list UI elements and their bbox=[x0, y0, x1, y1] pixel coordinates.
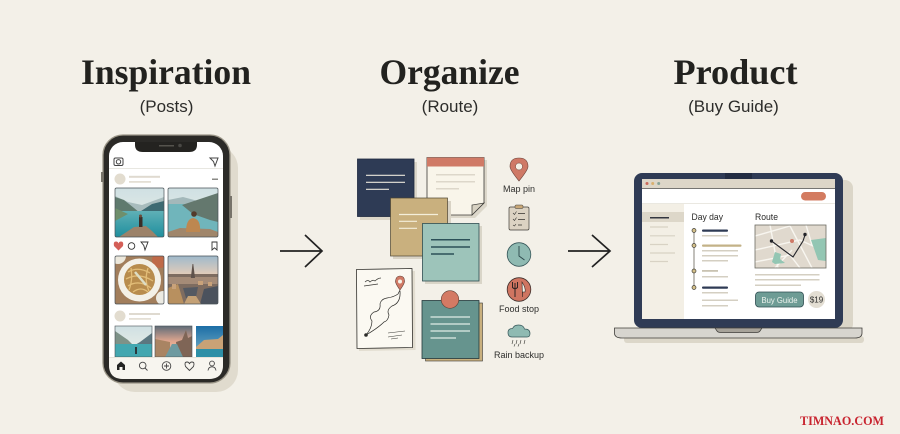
price badge: $19 bbox=[810, 296, 824, 304]
icon: clock bbox=[507, 243, 531, 266]
icon: search bbox=[139, 362, 148, 370]
route sketch map bbox=[356, 268, 416, 351]
icon: camera bbox=[114, 158, 123, 166]
icon: route pin bbox=[395, 276, 405, 290]
photo: lake hiker bbox=[115, 188, 164, 237]
note: cream with header bbox=[427, 158, 487, 218]
icon: add bbox=[162, 362, 171, 370]
note: teal bbox=[422, 224, 482, 284]
laptop mockup bbox=[614, 173, 864, 343]
photo: lake sitter bbox=[168, 188, 218, 237]
watermark: TIMNAO.COM bbox=[800, 414, 884, 428]
infographic canvas bbox=[82, 59, 884, 425]
photo: pasta plate bbox=[115, 256, 164, 304]
heading: Organize: (Route) bbox=[422, 97, 478, 116]
post header bbox=[114, 174, 218, 184]
route map bbox=[755, 225, 826, 268]
icon: map pin bbox=[503, 158, 535, 194]
note: tan bbox=[390, 198, 451, 259]
sidebar bbox=[642, 204, 684, 319]
icon: checklist clipboard bbox=[509, 205, 529, 230]
heading: Organize: Organize bbox=[380, 52, 520, 92]
icon: map pin: Map pin bbox=[503, 184, 535, 194]
day itinerary bbox=[692, 212, 742, 306]
route panel: Route bbox=[755, 212, 778, 223]
button: Buy Guide: Buy Guide bbox=[762, 295, 798, 305]
icon: home bbox=[117, 362, 125, 370]
heading: Organize bbox=[380, 52, 520, 116]
post header bbox=[114, 310, 160, 322]
phone mockup bbox=[101, 135, 238, 392]
arrow: inspiration to organize bbox=[280, 235, 322, 267]
heading: Inspiration: (Posts) bbox=[140, 97, 193, 116]
photo: city skyline bbox=[168, 256, 218, 304]
bottom navigation bbox=[109, 357, 223, 379]
laptop base bbox=[614, 328, 862, 338]
note: dark teal with pin bbox=[422, 291, 482, 361]
note: navy bbox=[358, 159, 417, 220]
route panel bbox=[755, 212, 826, 308]
heading: Inspiration bbox=[81, 52, 251, 116]
heading: Product: Product bbox=[674, 52, 798, 92]
icon: profile bbox=[208, 361, 216, 370]
icon: rain cloud: Rain backup bbox=[494, 350, 544, 360]
browser title bar bbox=[642, 179, 835, 189]
button: header pill bbox=[801, 192, 826, 200]
icon: rain cloud bbox=[494, 325, 544, 360]
photo strip bbox=[115, 326, 223, 357]
arrow: organize to product bbox=[568, 235, 610, 267]
heading: Inspiration: Inspiration bbox=[81, 52, 251, 92]
heading: Product bbox=[674, 52, 798, 116]
icon: food stop: Food stop bbox=[499, 304, 539, 314]
icon: send bbox=[210, 158, 218, 166]
day itinerary: Day day bbox=[692, 212, 723, 223]
icon: like bbox=[185, 362, 194, 370]
heading: Product: (Buy Guide) bbox=[688, 97, 779, 116]
post actions bbox=[114, 242, 217, 250]
icon: food stop bbox=[499, 278, 539, 314]
